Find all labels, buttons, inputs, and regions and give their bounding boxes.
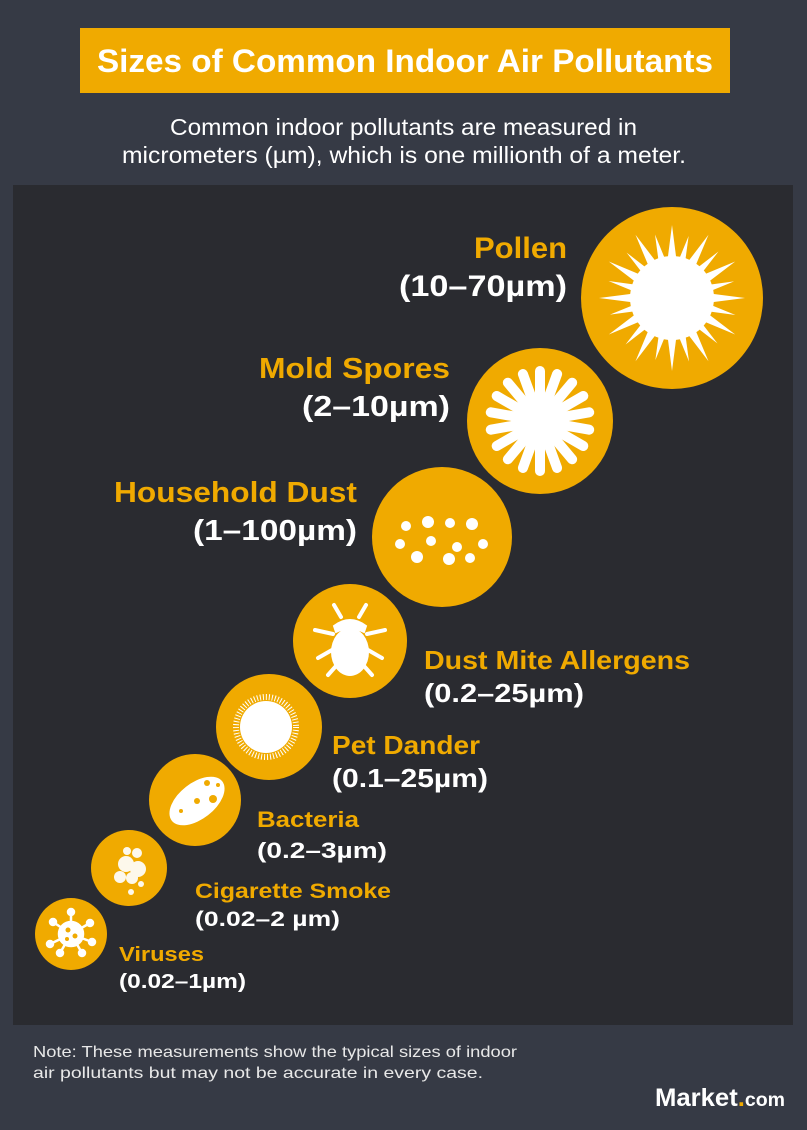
label: household dust [114,477,357,547]
label: mold spores: (2–10µm) [302,391,450,423]
icon: mold spores [467,348,613,494]
note: Note: These measurements show the typical sizes of indoor [33,1044,518,1061]
panel: main dark area [13,185,793,1025]
subtitle: Common indoor pollutants are measured in [170,114,637,140]
label: pet dander: Pet Dander [332,730,480,760]
subtitle [122,114,686,168]
icon: pet dander [216,674,322,780]
icon: dust mite [293,584,407,698]
label: dust mite allergens: Dust Mite Allergens [424,645,690,675]
label: household dust: Household Dust [114,477,357,509]
logo: Market.com [655,1084,785,1112]
title banner: Sizes of Common Indoor Air Pollutants [97,43,713,79]
note [33,1044,518,1082]
label: mold spores: Mold Spores [259,353,450,385]
title banner [80,28,730,93]
label: bacteria: (0.2–3µm) [257,838,387,863]
icon: virus [35,898,107,970]
label: dust mite allergens [424,645,690,708]
label: household dust: (1–100µm) [193,515,357,547]
icon: cigarette smoke [91,830,167,906]
label: bacteria [257,807,387,863]
label: cigarette smoke: Cigarette Smoke [195,880,391,903]
label: bacteria: Bacteria [257,807,360,832]
label: pollen: (10–70µm) [399,270,567,303]
label: viruses: (0.02–1µm) [119,971,246,993]
label: cigarette smoke [195,880,391,931]
label: cigarette smoke: (0.02–2 µm) [195,908,340,931]
label: pet dander [332,730,488,793]
label: pollen [399,232,567,303]
label: viruses [119,944,246,993]
label: pollen: Pollen [474,232,567,265]
subtitle: micrometers (µm), which is one millionth of a meter. [122,142,686,168]
label: pet dander: (0.1–25µm) [332,763,488,793]
icon: bacteria [149,754,241,846]
label: dust mite allergens: (0.2–25µm) [424,678,584,708]
icon: pollen [581,207,763,389]
label: viruses: Viruses [119,944,204,966]
icon: household dust [372,467,512,607]
note: air pollutants but may not be accurate in every case. [33,1065,483,1082]
label: mold spores [259,353,450,423]
